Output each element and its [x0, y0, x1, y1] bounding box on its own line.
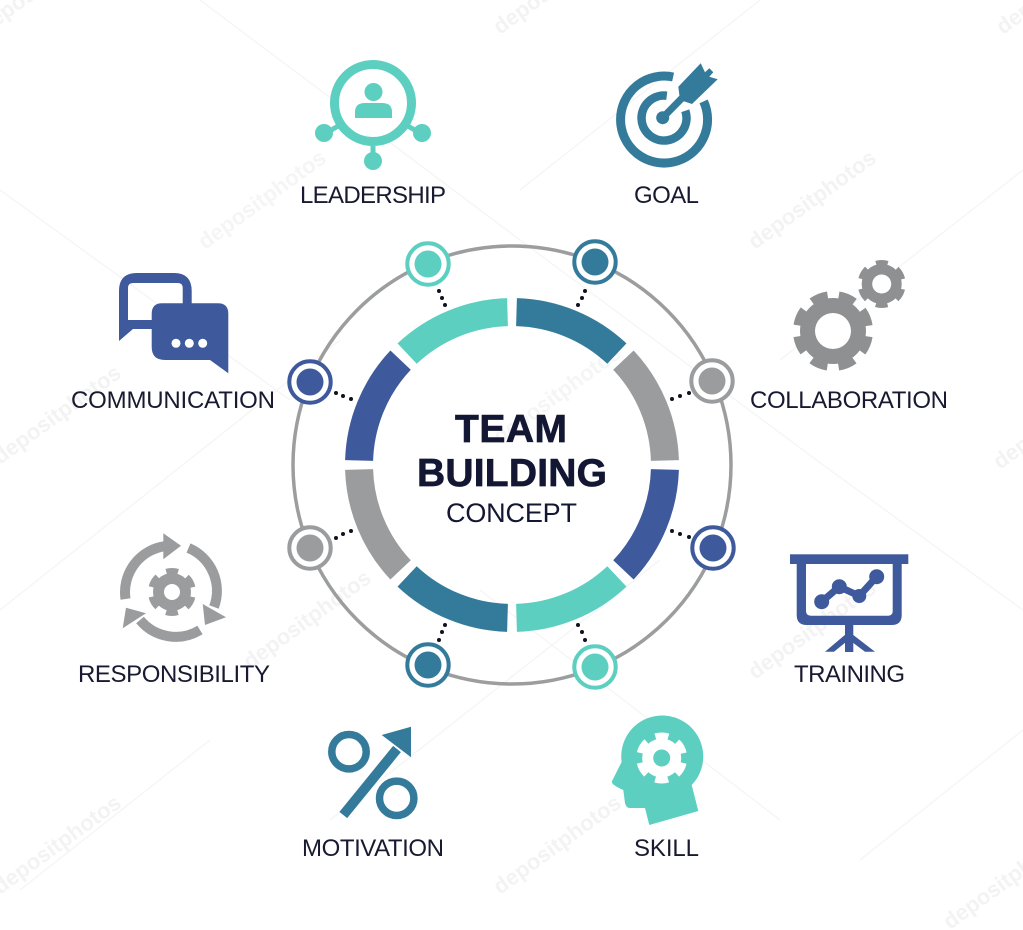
- text: depositphotos: [238, 565, 376, 674]
- segment: skill: [516, 576, 617, 618]
- segment: responsibility: [359, 470, 401, 570]
- text: depositphotos: [488, 340, 626, 449]
- text: depositphotos: [743, 575, 881, 684]
- icon: training board: [790, 554, 908, 652]
- title: BUILDING: [417, 452, 607, 495]
- text: depositphotos: [488, 790, 626, 899]
- node: communication: [289, 361, 331, 403]
- segment: training: [623, 470, 665, 570]
- title: [417, 408, 607, 528]
- label: motivation: MOTIVATION: [302, 835, 444, 862]
- icon: goal: [621, 63, 718, 163]
- label: leadership: LEADERSHIP: [300, 182, 446, 209]
- icon: collaboration gears: [797, 262, 903, 367]
- icon: skill head with gear: [612, 715, 703, 825]
- node: collaboration: [691, 360, 733, 402]
- text: depositphotos: [193, 145, 331, 254]
- title: TEAM: [455, 408, 567, 451]
- icon: communication bubbles: [119, 273, 228, 373]
- label: responsibility: RESPONSIBILITY: [78, 661, 270, 688]
- text: depositphotos: [743, 145, 881, 254]
- segment: goal: [516, 312, 617, 354]
- label: goal: GOAL: [634, 182, 699, 209]
- label: training: TRAINING: [794, 661, 905, 688]
- label: collaboration: COLLABORATION: [750, 387, 948, 414]
- title: CONCEPT: [446, 498, 577, 528]
- segment: communication: [359, 360, 401, 460]
- node: responsibility: [289, 527, 331, 569]
- icon: motivation percent arrow: [332, 727, 414, 816]
- segment: leadership: [407, 312, 508, 354]
- node: training: [692, 527, 734, 569]
- node: motivation: [407, 644, 449, 686]
- segment: motivation: [407, 576, 508, 618]
- segmented central ring: [359, 312, 665, 618]
- label: skill: SKILL: [634, 835, 699, 862]
- dotted connectors: [334, 289, 691, 642]
- label: communication: COMMUNICATION: [71, 387, 275, 414]
- icon: responsibility cycle: [123, 533, 226, 637]
- segment: collaboration: [623, 360, 665, 460]
- node: goal: [574, 241, 616, 283]
- icon: leadership: [315, 64, 431, 170]
- node: leadership: [407, 243, 449, 285]
- node: skill: [574, 646, 616, 688]
- outer ring: [293, 246, 731, 684]
